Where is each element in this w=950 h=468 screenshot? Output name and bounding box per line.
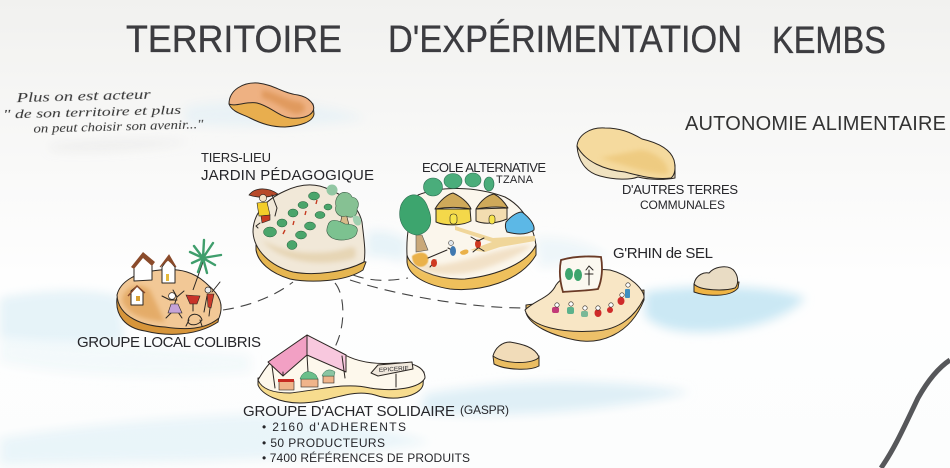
- dashed connections between islands: [223, 275, 525, 347]
- quote: on peut choisir son avenir...": [33, 117, 204, 136]
- icon: villagers: [162, 282, 220, 326]
- label: groupe local colibris: GROUPE LOCAL COLIBRIS: [77, 334, 261, 351]
- icon: huts: [435, 193, 508, 225]
- quote: Plus on est acteur: [15, 88, 152, 106]
- island: groupe local colibris: [117, 240, 221, 334]
- label and figures: groupe d'achat solidaire: • 50 PRODUCTEURS: [262, 436, 385, 450]
- watercolour water washes: [0, 101, 805, 465]
- icon: pupils: [552, 283, 630, 317]
- label: d'autres terres communales: [622, 182, 738, 212]
- island: small right: [694, 267, 739, 295]
- title: [126, 18, 886, 62]
- label and figures: groupe d'achat solidaire: GROUPE D'ACHAT SOLIDAIRE: [243, 403, 455, 420]
- icon: épicerie sign: EPICERIE: [379, 366, 409, 374]
- quote: [2, 86, 204, 137]
- title: TERRITOIRE: [126, 19, 342, 61]
- label and figures: groupe d'achat solidaire: • 2160 d'ADHERENTS: [262, 420, 406, 434]
- label: école alternative tzana: ECOLE ALTERNATIVE: [422, 160, 546, 175]
- icon: tree: [326, 184, 361, 240]
- title: KEMBS: [772, 20, 886, 62]
- label: tiers-lieu jardin pédagogique: TIERS-LIEU: [201, 150, 271, 165]
- icon: market stall: [268, 335, 346, 390]
- icon: palm tree: [190, 240, 221, 290]
- title: D'EXPÉRIMENTATION: [388, 18, 742, 61]
- subtitle: autonomie alimentaire: AUTONOMIE ALIMENTAIRE: [685, 113, 946, 135]
- quote: " de son territoire et plus: [3, 103, 181, 122]
- label: tiers-lieu jardin pédagogique: [201, 150, 374, 184]
- label: d'autres terres communales: COMMUNALES: [640, 198, 725, 212]
- island: g'rhin de sel: [525, 256, 644, 341]
- label: tiers-lieu jardin pédagogique: JARDIN PÉDAGOGIQUE: [201, 167, 374, 184]
- label and figures: groupe d'achat solidaire: [243, 403, 509, 465]
- vegetable beds: [264, 192, 332, 250]
- island: d'autres terres communales: [577, 128, 675, 179]
- icon: houses: [128, 252, 176, 305]
- icon: blackboard: [560, 256, 602, 292]
- label: école alternative tzana: [422, 160, 546, 186]
- label: école alternative tzana: TZANA: [496, 174, 534, 186]
- island: jardin pédagogique: [249, 184, 366, 281]
- icon: children: [428, 237, 484, 267]
- icon: trees: [400, 173, 494, 252]
- label and figures: groupe d'achat solidaire: (GASPR): [460, 403, 509, 417]
- icon: gardener: [249, 189, 278, 228]
- label and figures: groupe d'achat solidaire: • 7400 RÉFÉRENCES DE PRODUITS: [262, 450, 470, 465]
- icon: pond: [505, 212, 534, 234]
- label: d'autres terres communales: D'AUTRES TERRES: [622, 182, 738, 197]
- island: groupe d'achat solidaire: [258, 335, 425, 403]
- river stroke at bottom right: [881, 360, 950, 468]
- icon: épicerie sign: [371, 362, 413, 387]
- label: g'rhin de sel: G'RHIN de SEL: [613, 245, 713, 262]
- island: école alternative: [400, 173, 536, 290]
- island: small bottom: [493, 342, 539, 369]
- island: top orange: [229, 83, 314, 127]
